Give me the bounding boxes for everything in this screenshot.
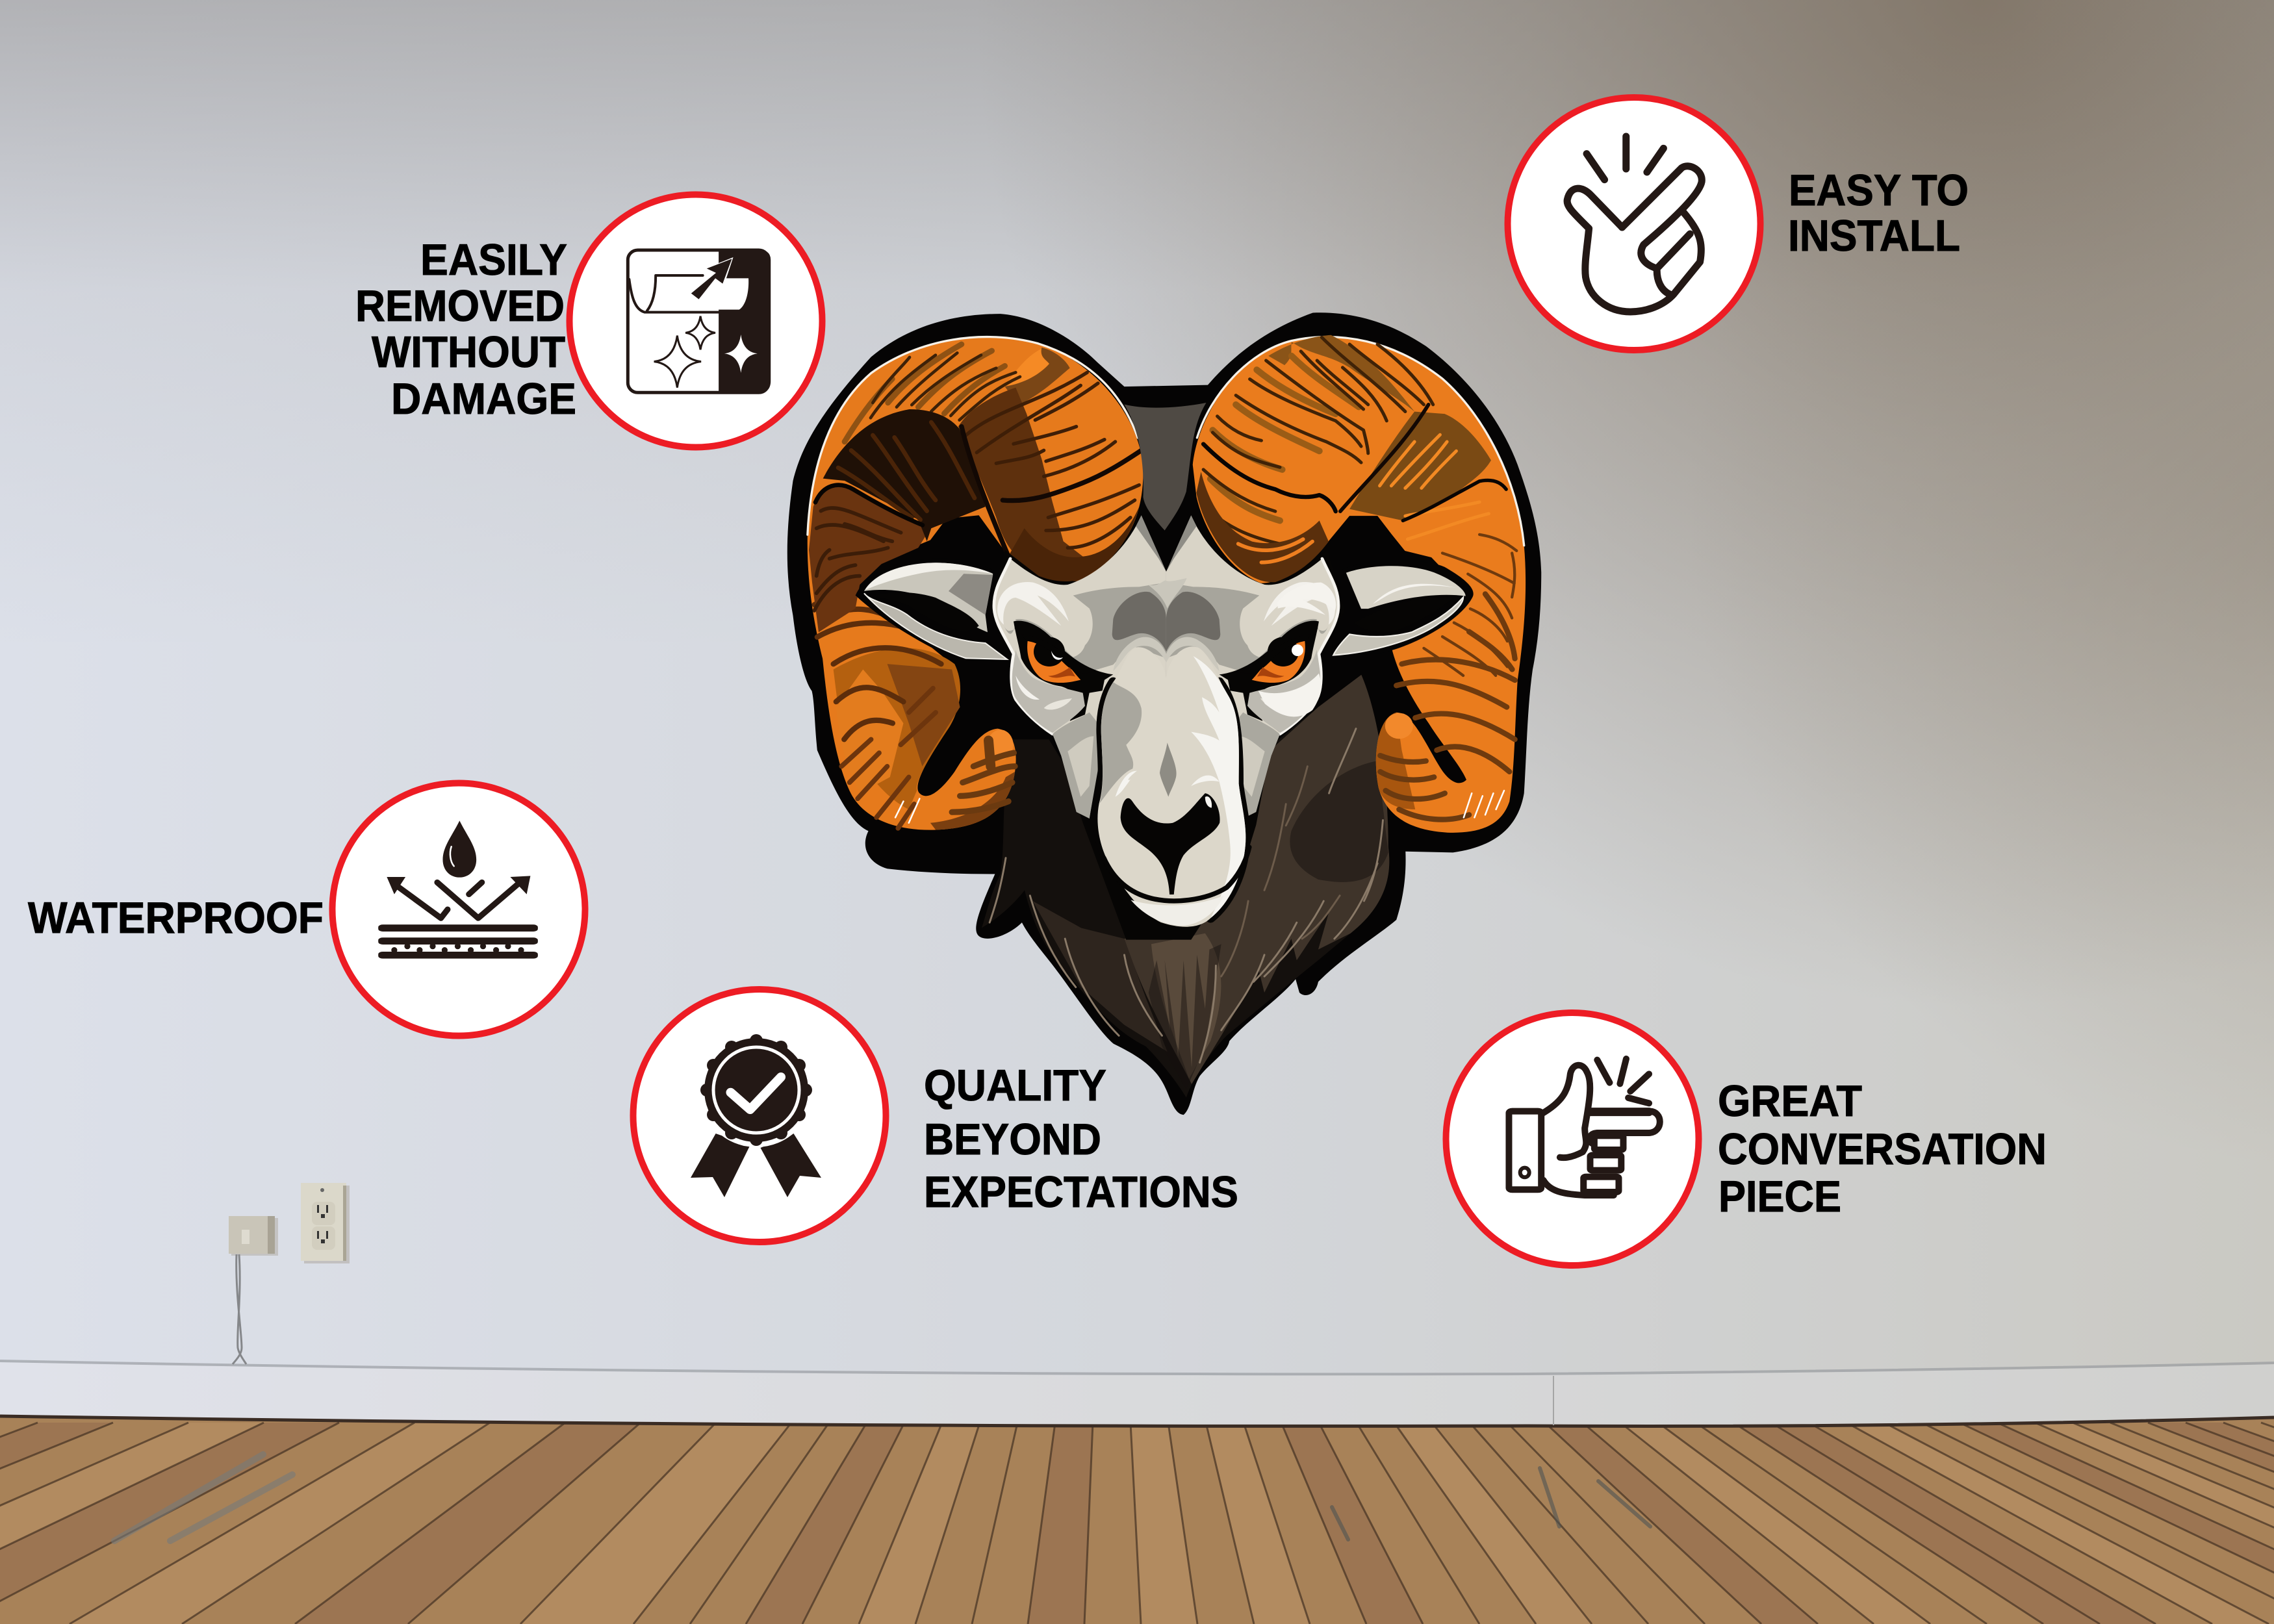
beard fur [982, 675, 1389, 1098]
forehead fur tuft [1148, 578, 1187, 609]
label: QUALITY [924, 1061, 1106, 1110]
label: BEYOND [924, 1115, 1101, 1164]
label: DAMAGE [391, 374, 576, 424]
right horn base shape [1193, 337, 1526, 833]
icon: finger snap thumbs up [1509, 1059, 1660, 1195]
left horn base shape [808, 337, 1143, 830]
label [1718, 1076, 2047, 1221]
left horn [808, 337, 1143, 830]
feature: quality beyond expectations [633, 989, 1238, 1242]
icon: peeling sticker with sparkles [628, 249, 771, 394]
power cord [233, 1254, 246, 1364]
right half of face [1166, 515, 1338, 818]
icon: award rosette [691, 1033, 821, 1197]
label: CONVERSATION [1718, 1124, 2047, 1174]
label: REMOVED [355, 281, 565, 331]
left half of face [994, 515, 1166, 818]
label: EASY TO [1789, 166, 1969, 215]
feature: easy to install [1507, 97, 1969, 350]
label [355, 235, 576, 424]
wall switch plate [229, 1216, 278, 1256]
right horn [1193, 335, 1526, 833]
right horn coil stripes [1196, 335, 1516, 676]
label: PIECE [1718, 1172, 1841, 1221]
badge circle [1446, 1013, 1698, 1265]
ram head decal [787, 312, 1541, 1115]
nose and mouth [1104, 793, 1249, 926]
black head underlay [988, 550, 1345, 940]
right side highlights [1278, 583, 1336, 615]
label: EASILY [420, 235, 567, 285]
label: EXPECTATIONS [924, 1167, 1238, 1217]
feature: waterproof [28, 783, 585, 1035]
power outlet [301, 1183, 350, 1263]
right ear [1331, 561, 1474, 657]
feature: easily removed without damage [355, 195, 823, 447]
muzzle black border [1097, 682, 1246, 918]
badge circle [569, 195, 823, 447]
wooden floor [0, 1410, 2274, 1624]
badge circle [333, 783, 585, 1035]
feature: great conversation piece [1446, 1013, 2047, 1265]
badge circle [1507, 97, 1761, 350]
label [924, 1061, 1238, 1217]
forehead dark fur [1124, 403, 1206, 531]
sticker black silhouette [787, 312, 1541, 1115]
left eye highlight [1051, 651, 1063, 660]
label: WATERPROOF [28, 893, 324, 943]
icon: snapping fingers [1567, 136, 1702, 312]
left horn coil stripes [809, 344, 1142, 632]
icon: water drop over layers [378, 820, 538, 959]
badge circle [633, 989, 886, 1242]
baseboard [0, 1361, 2274, 1426]
label: WITHOUT [372, 327, 565, 377]
label [1788, 166, 1969, 260]
label: INSTALL [1788, 211, 1960, 260]
left ear [856, 559, 1018, 663]
muzzle [1097, 646, 1246, 927]
ram face [988, 515, 1345, 940]
right eye highlight [1292, 644, 1303, 656]
label: GREAT [1718, 1076, 1862, 1126]
